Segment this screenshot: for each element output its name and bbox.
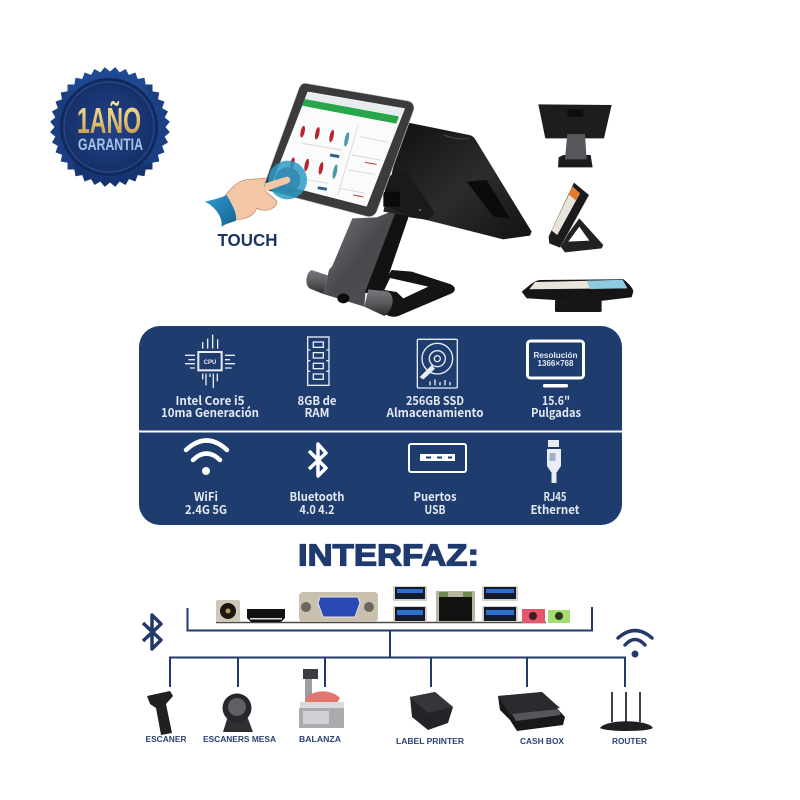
label: TOUCH: TOUCH <box>218 230 278 250</box>
spec: WiFi <box>185 440 227 518</box>
touch ripple <box>268 161 307 199</box>
device: handheld scanner <box>146 691 187 744</box>
device: label printer <box>396 692 464 746</box>
icon: Bluetooth <box>143 615 161 649</box>
main POS terminal <box>264 83 532 317</box>
port: VGA <box>299 592 378 622</box>
icon: RAM module <box>308 337 329 385</box>
panel: specifications <box>139 326 622 525</box>
thumbnail: top view <box>522 279 633 312</box>
icon: USB port <box>409 444 466 472</box>
port: HDMI <box>247 609 285 622</box>
icon: CPU chip: CPU <box>204 359 216 366</box>
port: audio pink <box>522 609 545 623</box>
spec: USB: USB <box>424 501 446 518</box>
spec: RAM: 8GB de <box>298 392 337 409</box>
spec: SSD: 256GB SSD <box>406 392 464 409</box>
spec: RJ45: Ethernet <box>530 501 580 518</box>
spec: RAM: RAM <box>304 404 330 421</box>
icon: WiFi <box>618 630 652 658</box>
stand and base <box>306 200 455 317</box>
heading: INTERFAZ: INTERFAZ: <box>298 538 479 572</box>
device: scale <box>299 669 344 744</box>
thumbnail: rear view <box>538 104 612 167</box>
badge: 1 año garantía <box>50 67 170 187</box>
spec: SSD <box>386 339 484 421</box>
device: desktop scanner: ESCANERS MESA <box>203 735 276 744</box>
spec: screen <box>528 341 584 421</box>
spec: USB <box>409 444 466 518</box>
spec: Bluetooth: Bluetooth <box>290 488 344 505</box>
spec: CPU: 10ma Generación <box>161 404 259 421</box>
spec: Bluetooth <box>290 444 344 518</box>
front monitor <box>264 83 414 217</box>
spec: CPU <box>161 335 259 421</box>
icon: monitor with resolution: Resolución <box>534 351 578 360</box>
spec: USB: Puertos <box>414 488 457 505</box>
device: router <box>600 692 653 746</box>
rear monitor <box>383 122 532 239</box>
port: audio green <box>548 610 570 623</box>
rear I/O ports <box>216 586 570 623</box>
device: desktop scanner <box>203 694 276 744</box>
thumbnail: side view <box>549 183 603 252</box>
spec: SSD: Almacenamiento <box>386 404 484 421</box>
icon: monitor with resolution <box>528 341 584 388</box>
device: label printer: LABEL PRINTER <box>396 737 464 746</box>
device: router: ROUTER <box>612 737 647 746</box>
port: USB pair left <box>393 586 427 622</box>
icon: hard drive <box>417 339 457 388</box>
icon: Ethernet plug <box>547 440 561 483</box>
connector lines <box>170 607 625 687</box>
device: cash box <box>498 692 565 746</box>
spec: screen: Pulgadas <box>531 404 581 421</box>
badge: 1 año garantía: GARANTIA <box>78 136 143 154</box>
spec: RAM <box>298 337 337 421</box>
spec: screen: 15.6" <box>542 392 570 409</box>
badge: 1 año garantía: 1AÑO <box>77 99 141 141</box>
icon: WiFi <box>186 440 227 475</box>
devices <box>146 669 653 746</box>
icon: touching hand <box>205 177 290 227</box>
spec: WiFi: WiFi <box>194 488 218 505</box>
spec: CPU: Intel Core i5 <box>176 392 244 409</box>
device: cash box: CASH BOX <box>520 737 565 746</box>
port: USB pair right <box>482 586 518 622</box>
icon: Bluetooth <box>309 444 326 476</box>
device: scale: BALANZA <box>299 735 341 744</box>
port: Ethernet <box>436 591 475 622</box>
spec: RJ45: RJ45 <box>544 488 566 505</box>
spec: RJ45 <box>530 440 580 518</box>
port: DC jack <box>216 600 240 622</box>
screen <box>273 92 405 206</box>
icon: monitor with resolution: 1366×768 <box>538 359 574 368</box>
spec: Bluetooth: 4.0 4.2 <box>300 501 334 518</box>
device: handheld scanner: ESCANER <box>146 735 187 744</box>
spec: WiFi: 2.4G 5G <box>185 501 227 518</box>
